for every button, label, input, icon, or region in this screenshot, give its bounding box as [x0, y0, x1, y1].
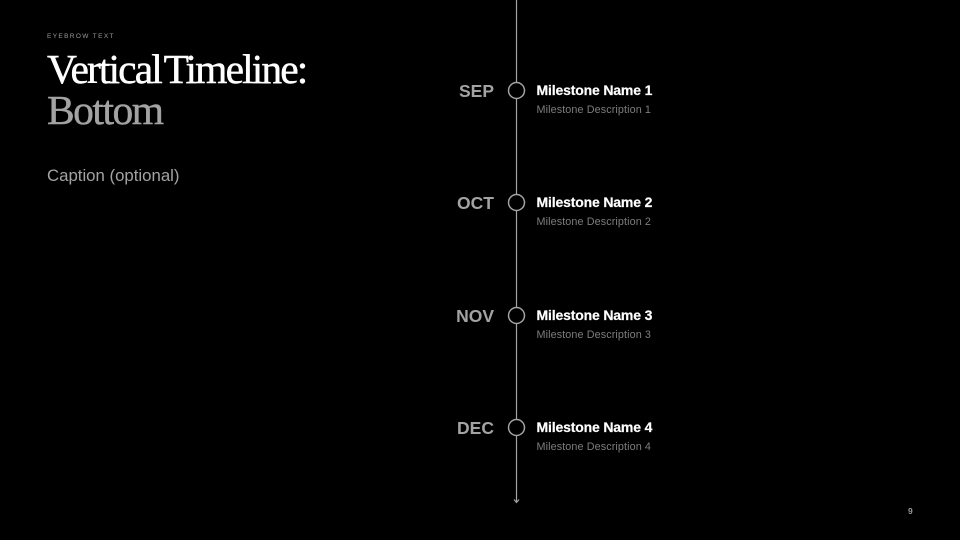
node: December — [508, 420, 524, 436]
milestone 2: Milestone Description 2 — [536, 216, 651, 228]
arrow head — [514, 500, 519, 502]
node: October — [508, 194, 524, 210]
milestone 1: Milestone Description 1 — [536, 104, 651, 116]
milestone 4: DEC — [457, 418, 494, 438]
axis line — [516, 0, 518, 502]
milestone 2: OCT — [457, 193, 494, 213]
title: Bottom — [47, 87, 163, 133]
timeline axis with arrow and nodes — [508, 0, 526, 504]
milestone 3 — [456, 306, 652, 341]
node: September — [508, 82, 524, 98]
milestone 3: NOV — [456, 306, 494, 326]
milestone 1: Milestone Name 1 — [536, 82, 652, 98]
milestone 3: Milestone Description 3 — [536, 329, 651, 341]
milestone 1: SEP — [459, 81, 494, 101]
node: November — [508, 308, 524, 324]
milestone 4: Milestone Description 4 — [536, 441, 651, 453]
title — [47, 46, 306, 133]
title: Vertical Timeline: — [47, 46, 306, 92]
caption: Caption (optional) — [47, 166, 179, 185]
page number: 9 — [908, 506, 913, 516]
milestone 2 — [457, 193, 652, 228]
milestone 1 — [459, 81, 652, 116]
milestone 4 — [457, 418, 652, 453]
milestone 3: Milestone Name 3 — [536, 307, 652, 323]
eyebrow text: EYEBROW TEXT — [47, 33, 115, 40]
milestone 4: Milestone Name 4 — [536, 419, 652, 435]
milestone 2: Milestone Name 2 — [536, 194, 652, 210]
